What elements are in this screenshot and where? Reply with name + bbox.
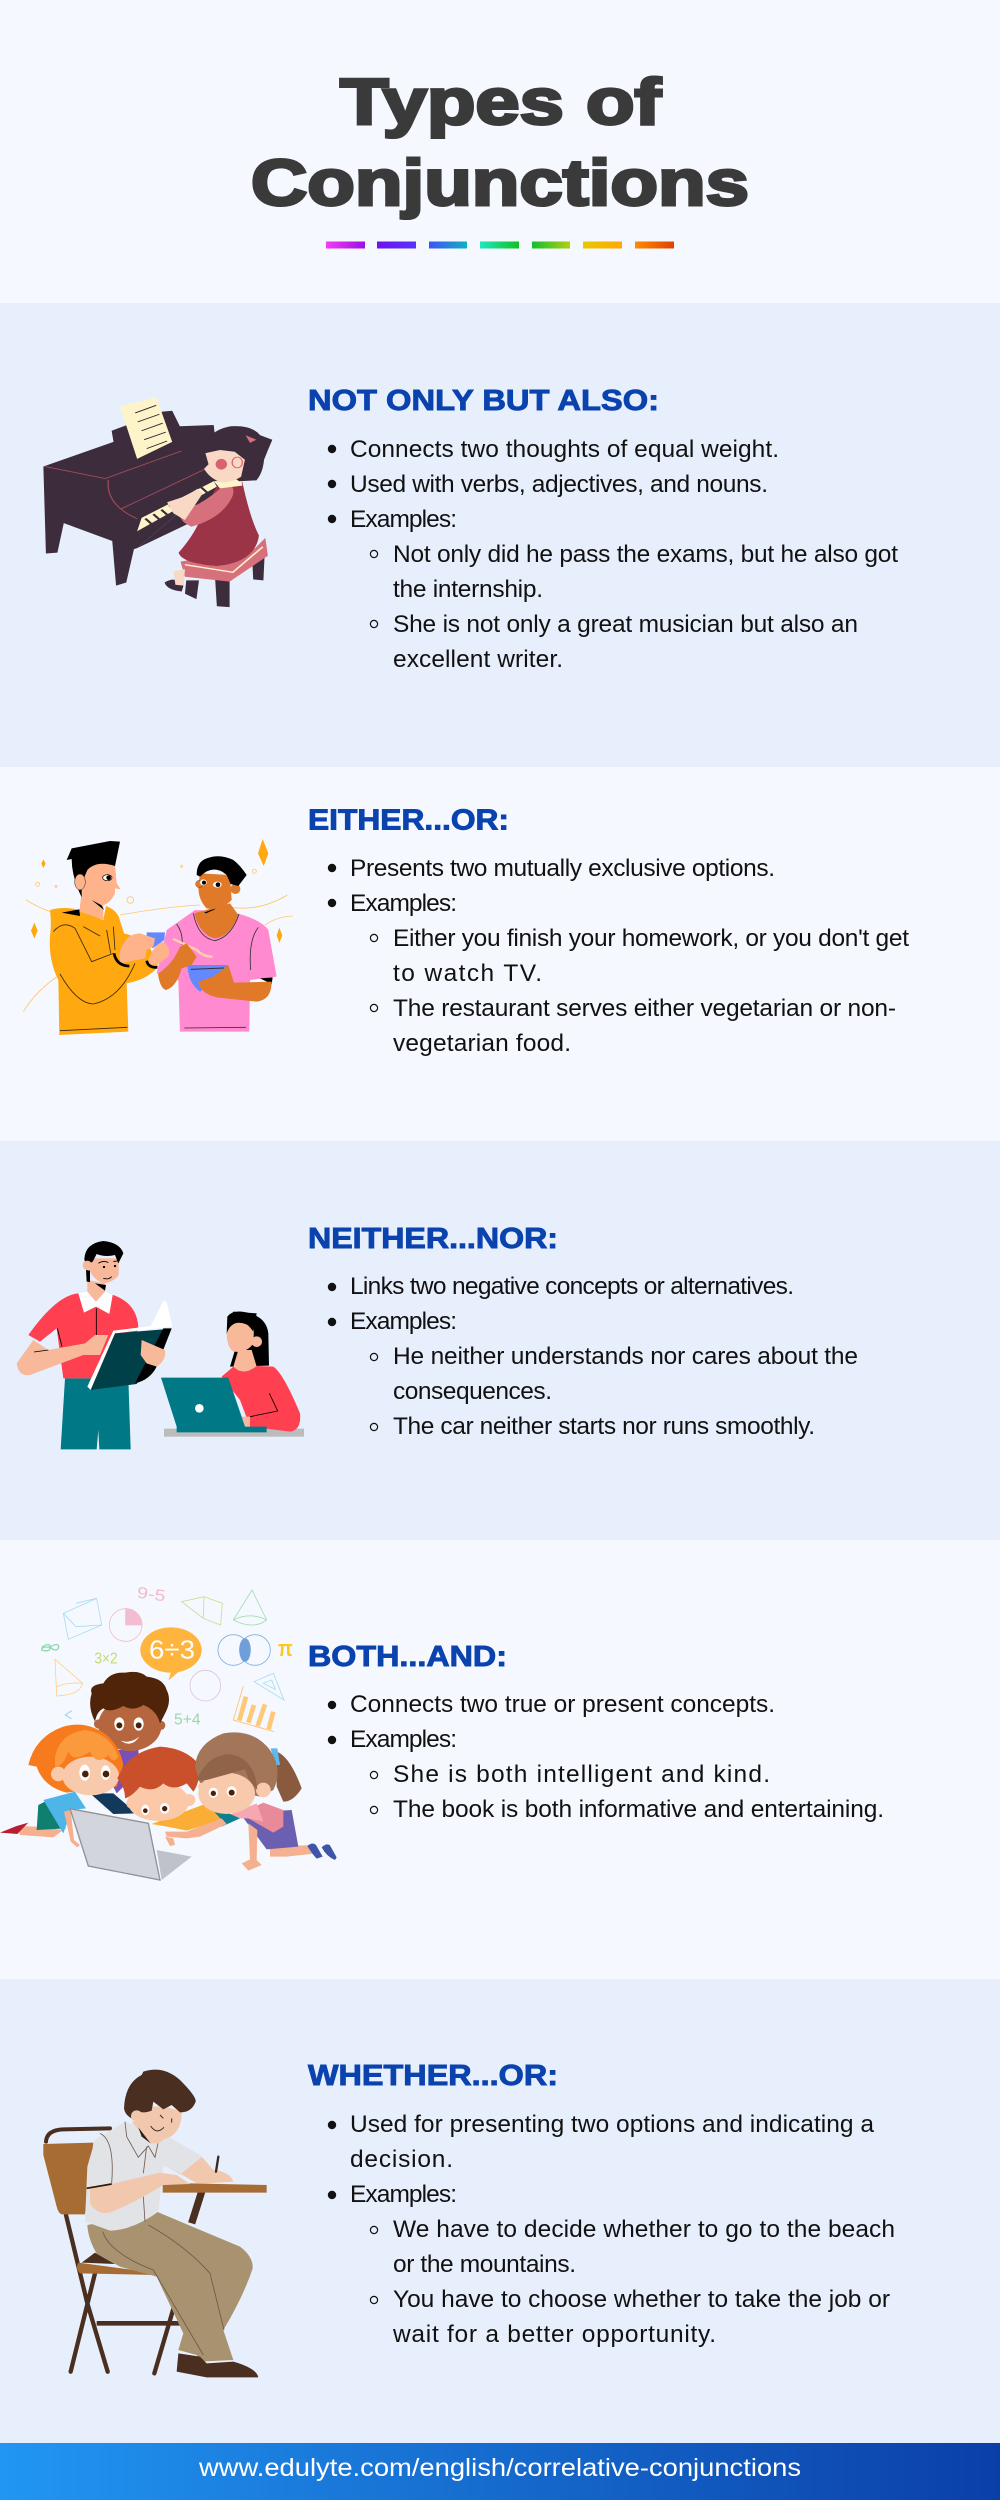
bullet list: We have to decide whether to go to the beach: [393, 2216, 895, 2243]
bullet list: The car neither starts nor runs smoothly.: [393, 1413, 815, 1440]
panel: both and: [0, 1540, 1000, 1979]
bullet list: Examples:: [350, 2181, 457, 2208]
bullet list: [328, 1273, 858, 1440]
illustration: two people with bowls: [23, 839, 293, 1035]
illustration: student writing at desk chair: [43, 2070, 267, 2377]
panel: header: [0, 0, 1000, 303]
bullet list: [328, 436, 898, 673]
bullet list: [328, 1691, 884, 1823]
stool: [185, 554, 265, 607]
heading: EITHER...OR:: [308, 804, 509, 836]
bullet list: Either you finish your homework, or you don't get: [393, 925, 909, 952]
right girl body: [270, 1845, 317, 1857]
bullet list: Connects two true or present concepts.: [350, 1691, 775, 1718]
hair and head: [205, 426, 272, 481]
middle boy body: [207, 1803, 240, 1827]
bullet list: Links two negative concepts or alternatives.: [350, 1273, 794, 1300]
heading: NOT ONLY BUT ALSO:: [308, 385, 659, 417]
left girl: [90, 1793, 137, 1814]
rainbow dashes: [326, 242, 674, 248]
bullet list: wait for a better opportunity.: [392, 2321, 716, 2348]
illustration: children at laptop with math doodles: 3×2: [94, 1650, 118, 1667]
heading: NEITHER...NOR:: [308, 1223, 558, 1255]
bullet list: or the mountains.: [393, 2251, 576, 2278]
bullet list: consequences.: [393, 1378, 552, 1405]
bullet list: Examples:: [350, 890, 457, 917]
bullet list: She is not only a great musician but also an: [393, 611, 858, 638]
footer bar: [0, 2443, 1000, 2500]
bullet list: decision.: [350, 2146, 453, 2173]
bullet list: to watch TV.: [393, 960, 542, 987]
right girl head: [277, 1752, 302, 1802]
title: [251, 65, 749, 219]
bullet list: [328, 2111, 895, 2348]
bullet list: She is both intelligent and kind.: [393, 1761, 770, 1788]
illustration: children at laptop with math doodles: 9-5: [136, 1585, 167, 1605]
illustration: children at laptop with math doodles: 5+4: [174, 1711, 201, 1728]
back boy: [113, 1750, 140, 1793]
bullet list: Used with verbs, adjectives, and nouns.: [350, 471, 768, 498]
bullet list: Presents two mutually exclusive options.: [350, 855, 775, 882]
bullet list: Not only did he pass the exams, but he also got: [393, 541, 898, 568]
bullet list: The restaurant serves either vegetarian or non-: [393, 995, 896, 1022]
illustration: children at laptop with math doodles: 6÷3: [149, 1634, 195, 1664]
illustration: man with book and woman at laptop: [17, 1241, 304, 1449]
title: Conjunctions: [251, 146, 749, 219]
laptop: [157, 1850, 192, 1880]
bullet list: Examples:: [350, 506, 457, 533]
panel: whether or: [0, 1979, 1000, 2443]
bullet list: the internship.: [393, 576, 543, 603]
middle boy head: [128, 1782, 189, 1821]
bullet list: You have to choose whether to take the job or: [393, 2286, 890, 2313]
footer url: www.edulyte.com/english/correlative-conjunctions: [198, 2454, 801, 2482]
bullet list: He neither understands nor cares about the: [393, 1343, 858, 1370]
bullet list: The book is both informative and entertaining.: [393, 1796, 884, 1823]
bullet list: vegetarian food.: [393, 1030, 571, 1057]
heading: BOTH...AND:: [308, 1641, 507, 1673]
title: Types of: [340, 65, 661, 138]
heading: WHETHER...OR:: [308, 2060, 558, 2092]
dress: [179, 482, 259, 566]
panel: neither nor: [0, 1141, 1000, 1540]
illustration: children at laptop with math doodles: π: [278, 1636, 293, 1661]
panel: not only but also: [0, 303, 1000, 767]
bullet list: Examples:: [350, 1726, 457, 1753]
bullet list: Connects two thoughts of equal weight.: [350, 436, 779, 463]
bullet list: Examples:: [350, 1308, 457, 1335]
bullet list: Used for presenting two options and indicating a: [350, 2111, 874, 2138]
bullet list: excellent writer.: [393, 646, 563, 673]
panel: either or: [0, 767, 1000, 1141]
bullet list: [328, 855, 909, 1057]
illustration: children at laptop with math doodles: [0, 1585, 337, 1880]
illustration: girl playing piano: [43, 397, 272, 607]
